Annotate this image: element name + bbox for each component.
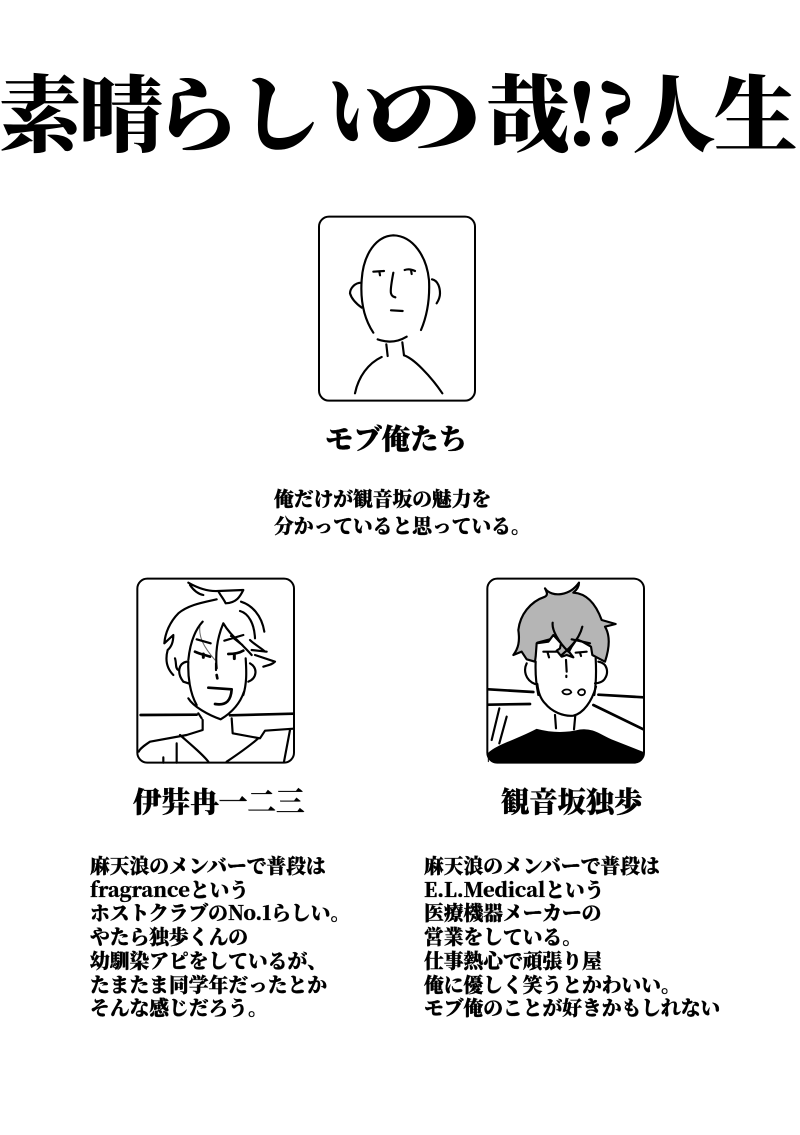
description: Hifumi: やたら独歩くんの <box>90 921 248 950</box>
description: Hifumi: fragranceという <box>90 874 249 903</box>
description: Doppo: 医療機器メーカーの <box>424 897 601 926</box>
description: Doppo <box>424 850 720 1021</box>
description: Doppo: 仕事熱心で頑張り屋 <box>424 945 602 974</box>
description: Doppo: E.L.Medicalという <box>424 874 605 903</box>
description: mob: 俺だけが観音坂の魅力を <box>274 483 491 512</box>
description: Doppo: 麻天浪のメンバーで普段は <box>424 850 660 879</box>
name: Hifumi: 伊弉冉一二三 <box>133 780 305 821</box>
description: Hifumi: 幼馴染アピをしているが、 <box>90 945 327 974</box>
description: Hifumi: たまたま同学年だったとか <box>90 969 327 998</box>
title <box>0 13 798 171</box>
title: の <box>366 51 483 171</box>
description: Doppo: 営業をしている。 <box>424 921 582 950</box>
title: 素晴らし <box>0 49 322 170</box>
name: Doppo: 観音坂独歩 <box>501 780 642 821</box>
description: mob: 分かっていると思っている。 <box>274 510 531 538</box>
description: Doppo: 俺に優しく笑うとかわいい。 <box>424 969 681 998</box>
title: 哉!?人生 <box>486 49 798 170</box>
description: Hifumi <box>90 850 350 1021</box>
title: ぃ <box>319 13 403 170</box>
description: Hifumi: そんな感じだろう。 <box>90 992 268 1021</box>
name: mob: モブ俺たち <box>325 417 467 458</box>
description: Hifumi: ホストクラブのNo.1らしい。 <box>90 897 350 926</box>
description: Doppo: モブ俺のことが好きかもしれない <box>424 992 720 1021</box>
description: mob <box>274 483 531 538</box>
description: Hifumi: 麻天浪のメンバーで普段は <box>90 850 326 879</box>
